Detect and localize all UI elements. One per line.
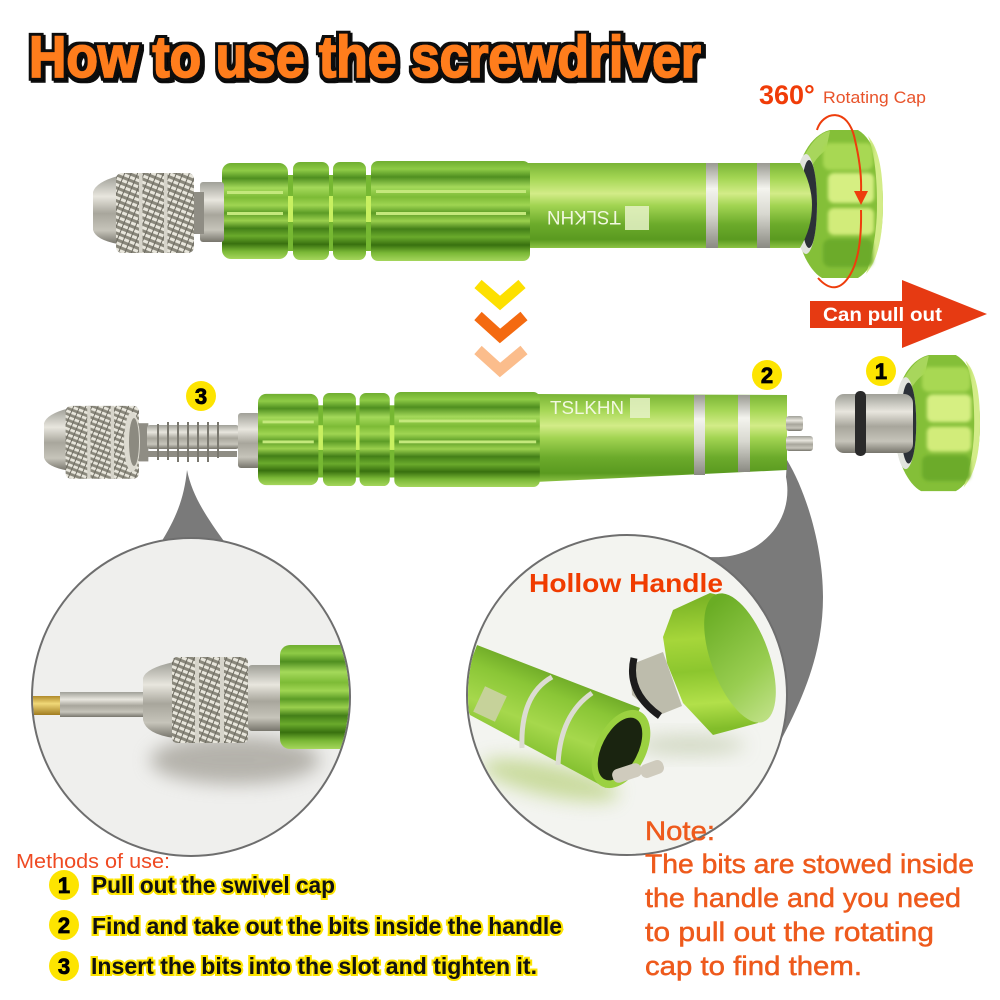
- note: Note:: [645, 816, 715, 846]
- callout wedge right: [700, 460, 823, 742]
- removed cap with stem: [835, 355, 980, 491]
- circle photo: hollow handle: [460, 535, 791, 855]
- step 2: Find and take out the bits inside the handle: [92, 913, 562, 939]
- rotation arrow: [817, 115, 868, 287]
- shadow: [478, 750, 622, 810]
- disassembled screwdriver: [44, 392, 813, 487]
- step 3: 3: [58, 954, 70, 979]
- assembled screwdriver: [93, 130, 883, 278]
- bits: [612, 760, 664, 783]
- rings: [522, 677, 592, 765]
- step 1: Pull out the swivel cap: [92, 872, 335, 898]
- collar: [200, 182, 224, 242]
- stored bits: [786, 416, 813, 451]
- green cap: [663, 593, 776, 735]
- handle: [258, 392, 540, 487]
- o-ring: [855, 391, 866, 456]
- brand logo upside down: [547, 206, 649, 230]
- arrow: can pull out: Can pull out: [823, 304, 943, 326]
- knurled chuck: [93, 173, 204, 253]
- chevrons pointing down: [478, 284, 524, 370]
- screwdriver shaft: [526, 163, 812, 248]
- shaft rings: [706, 163, 770, 248]
- circle photo: chuck with bit: [30, 538, 360, 856]
- note: [645, 816, 974, 981]
- tube: [460, 645, 640, 788]
- number badge 2: [752, 360, 782, 390]
- brand logo: TSLKHN: [550, 398, 624, 418]
- note: The bits are stowed inside: [645, 849, 974, 879]
- rotating cap label: [759, 80, 926, 110]
- brand logo upside down: TSLKHN: [547, 206, 621, 227]
- step 2: 2: [58, 913, 70, 938]
- number badge 2: 2: [761, 363, 773, 388]
- bit: [30, 692, 145, 717]
- shaft rings: [694, 395, 750, 475]
- cap shadow: [635, 735, 745, 755]
- cap: [895, 355, 980, 491]
- note: to pull out the rotating: [645, 917, 934, 947]
- handle: [222, 161, 530, 261]
- collar: [238, 413, 260, 468]
- tube opening: [592, 710, 650, 788]
- rotating cap label: 360°: [759, 80, 815, 110]
- number badge 3: 3: [195, 384, 207, 409]
- number badge 1: [866, 356, 896, 386]
- step 3: Insert the bits into the slot and tighten it.: [91, 953, 537, 979]
- methods heading: Methods of use:: [16, 851, 170, 873]
- chuck: [143, 657, 248, 743]
- title: How to use the screwdriver: [29, 25, 701, 90]
- number badge 1: 1: [875, 359, 887, 384]
- step 1: 1: [58, 873, 70, 898]
- hollow handle label: Hollow Handle: [529, 568, 723, 598]
- collar: [248, 665, 280, 731]
- chuck removed: [44, 406, 148, 479]
- rotating cap: [795, 130, 883, 278]
- number badge 3: [186, 381, 216, 411]
- metal stem: [835, 394, 913, 453]
- shadow: [150, 736, 320, 784]
- rotating cap label: Rotating Cap: [823, 89, 926, 107]
- callout wedge left: [160, 470, 226, 544]
- cap stem: [630, 652, 682, 716]
- green handle: [280, 645, 349, 749]
- threaded stud: [147, 422, 239, 462]
- shaft: [535, 394, 787, 482]
- logo patch: [473, 686, 507, 722]
- arrow: can pull out: [810, 280, 987, 348]
- note: cap to find them.: [645, 951, 862, 981]
- chuck opening: [124, 412, 140, 472]
- note: the handle and you need: [645, 883, 961, 913]
